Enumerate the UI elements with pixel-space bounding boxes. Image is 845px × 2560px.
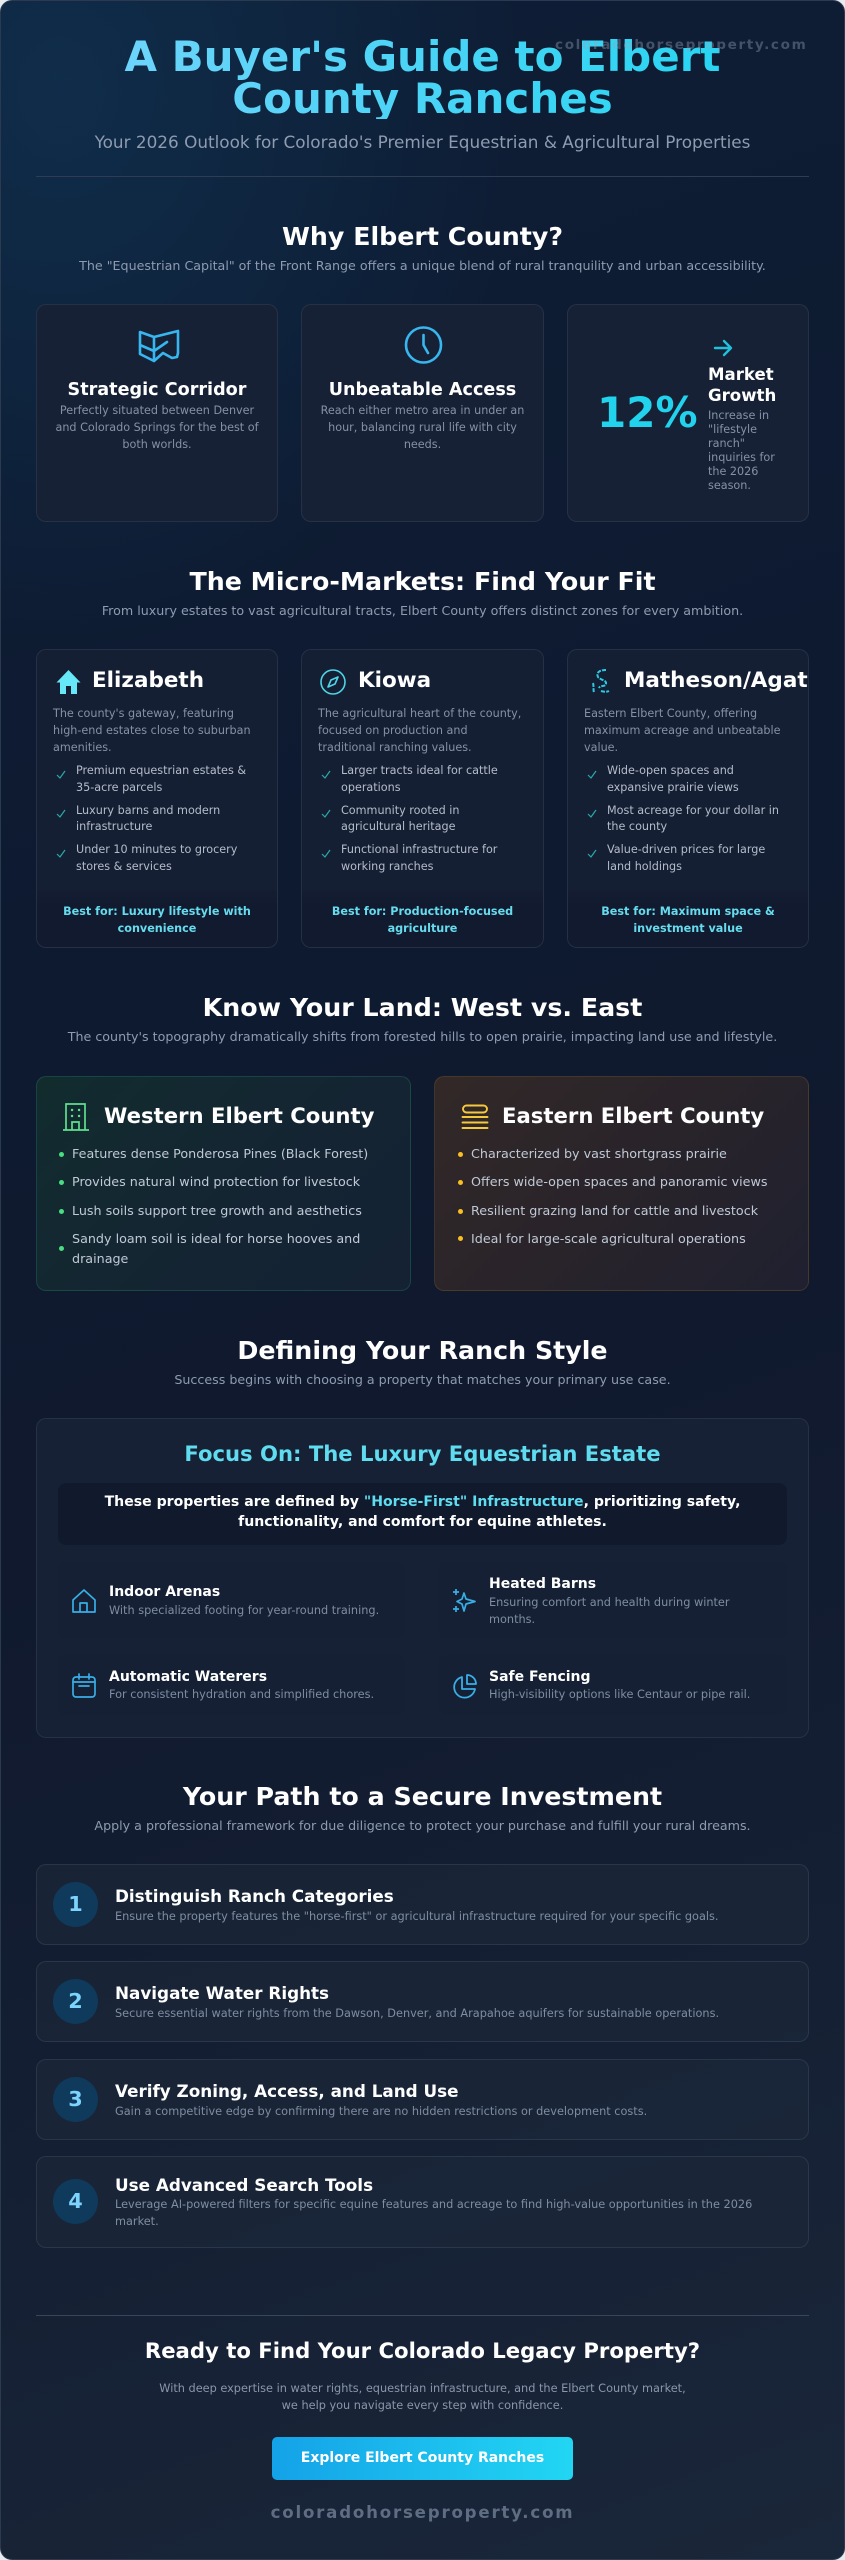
card text: Reach either metro area in under an: [321, 404, 524, 417]
region list: [458, 1146, 768, 1246]
icon: clock: [404, 326, 442, 364]
feature: safe fencing: [439, 1655, 787, 1715]
icon: house: [56, 670, 80, 694]
panel: market growth: [567, 304, 809, 522]
callout: horse-first: [58, 1483, 787, 1545]
checklist: [588, 764, 779, 873]
button: explore: Explore Elbert County Ranches: [301, 2450, 544, 2466]
checklist: [322, 764, 498, 873]
stat: 12 percent: 12%: [597, 388, 698, 437]
feature: indoor arenas: Indoor Arenas: [109, 1584, 220, 1600]
checklist: [56, 764, 246, 873]
feature: heated barns: Ensuring comfort and health during winter: [489, 1596, 730, 1608]
card text: needs.: [404, 438, 441, 451]
region list: drainage: [72, 1251, 128, 1266]
card text: "lifestyle: [708, 423, 757, 436]
checklist: Larger tracts ideal for cattle: [341, 764, 498, 777]
best for: [568, 890, 808, 947]
panel: kiowa: [301, 649, 544, 948]
icon: home: [72, 1589, 96, 1613]
step 1: 1: [68, 1892, 83, 1916]
icon: scale: [592, 669, 610, 693]
panel: matheson/agate: [567, 649, 809, 948]
step 4: 4: [68, 2189, 83, 2213]
text: micro-markets intro: From luxury estates to vast agricultural tracts, Elbert County offers distinct zones for every ambition.: [102, 603, 743, 618]
callout: horse-first: functionality, and comfort for equine athletes.: [238, 1514, 607, 1530]
region list: Features dense Ponderosa Pines (Black Forest): [72, 1146, 368, 1161]
watermark: site name top: coloradohorseproperty.com: [555, 37, 807, 53]
region name: Western Elbert County: [104, 1103, 374, 1128]
feature: indoor arenas: [58, 1562, 405, 1638]
card text: ranch": [708, 437, 745, 450]
feature: heated barns: [439, 1562, 787, 1638]
checklist: working ranches: [341, 860, 433, 873]
checklist: Value-driven prices for large: [607, 843, 765, 856]
best for: convenience: [118, 922, 196, 935]
best for: agriculture: [388, 922, 457, 935]
subtitle: Your 2026 Outlook for Colorado's Premier Equestrian & Agricultural Properties: [95, 132, 750, 152]
checklist: land holdings: [607, 860, 682, 873]
market name: Elizabeth: [92, 668, 204, 693]
step 2: [36, 1961, 809, 2042]
text: investment intro: Apply a professional framework for due diligence to protect your purchase and fulfill your rural dreams.: [94, 1818, 751, 1833]
step 4: Use Advanced Search Tools: [115, 2175, 373, 2195]
card text: Increase in: [708, 409, 769, 422]
checklist: expansive prairie views: [607, 781, 739, 794]
card text: Perfectly situated between Denver: [60, 404, 254, 417]
checklist: agricultural heritage: [341, 820, 456, 833]
step 2: Secure essential water rights from the Dawson, Denver, and Arapahoe aquifers for sustainable operations.: [115, 2007, 719, 2020]
card title: [708, 365, 776, 405]
text: land intro: The county's topography dramatically shifts from forested hills to open prairie, impacting land use and lifestyle.: [68, 1029, 777, 1044]
best for: Best for: Maximum space &: [601, 905, 775, 918]
card text: [708, 409, 775, 492]
region list: Offers wide-open spaces and panoramic views: [471, 1174, 768, 1189]
region list: [59, 1146, 368, 1266]
step 4: [36, 2156, 809, 2248]
text: call to action: [159, 2382, 686, 2412]
text: call to action: we help you navigate every step with confidence.: [282, 2399, 563, 2412]
card text: inquiries for: [708, 451, 775, 464]
icon: building: [63, 1103, 89, 1131]
feature: indoor arenas: With specialized footing for year-round training.: [109, 1604, 379, 1616]
heading: know your land: Know Your Land: West vs. East: [203, 993, 642, 1022]
step 1: Distinguish Ranch Categories: [115, 1886, 394, 1906]
checklist: Luxury barns and modern: [76, 804, 220, 816]
text: why elbert intro: The "Equestrian Capital" of the Front Range offers a unique blend of rural tranquility and urban accessibility.: [79, 258, 766, 273]
text: call to action: With deep expertise in water rights, equestrian infrastructure, and the Elbert County market,: [159, 2382, 686, 2395]
icon: pie chart: [453, 1674, 477, 1698]
market text: [318, 707, 521, 754]
heading: call to action: Ready to Find Your Colorado Legacy Property?: [145, 2338, 700, 2363]
icon: sparkles: [453, 1589, 476, 1612]
region list: Characterized by vast shortgrass prairie: [471, 1146, 727, 1161]
checklist: operations: [341, 781, 401, 794]
card text: and Colorado Springs for the best of: [55, 421, 259, 434]
button: explore: [272, 2437, 573, 2480]
step 4: market.: [115, 2215, 159, 2228]
heading: micro-markets: The Micro-Markets: Find Your Fit: [189, 567, 656, 596]
checklist: the county: [607, 820, 667, 833]
panel: luxury equestrian estate: [36, 1418, 809, 1738]
feature: heated barns: Heated Barns: [489, 1576, 596, 1592]
market text: high-end estates close to suburban: [53, 724, 251, 737]
feature: safe fencing: High-visibility options like Centaur or pipe rail.: [489, 1688, 750, 1701]
title: [100, 36, 745, 119]
feature: automatic waterers: Automatic Waterers: [109, 1669, 267, 1685]
icon: layers: [462, 1104, 488, 1129]
best for: Best for: Production-focused: [332, 905, 513, 918]
heading: secure investment: Your Path to a Secure Investment: [183, 1782, 662, 1811]
feature: automatic waterers: [58, 1655, 405, 1715]
checklist: Community rooted in: [341, 804, 459, 816]
callout: horse-first: These properties are defined by "Horse-First" Infrastructure, prioritizing safety,: [105, 1494, 740, 1510]
footer site name: coloradohorseproperty.com: [271, 2503, 574, 2522]
market text: Eastern Elbert County, offering: [584, 707, 757, 720]
best for: Best for: Luxury lifestyle with: [63, 905, 251, 918]
step 2: 2: [68, 1989, 83, 2013]
checklist: 35-acre parcels: [76, 781, 162, 794]
checklist: Premium equestrian estates &: [76, 764, 246, 777]
card text: [55, 404, 259, 451]
step 3: Gain a competitive edge by confirming there are no hidden restrictions or development costs.: [115, 2105, 647, 2118]
panel heading: Focus On: The Luxury Equestrian Estate: [184, 1441, 661, 1466]
panel: unbeatable access: [301, 304, 544, 522]
icon: arrow: [714, 340, 732, 356]
checklist: Wide-open spaces and: [607, 764, 734, 777]
market text: [53, 707, 251, 754]
title: A Buyer's Guide to Elbert: [124, 32, 721, 81]
region list: Ideal for large-scale agricultural operations: [471, 1231, 746, 1246]
step 2: Navigate Water Rights: [115, 1983, 329, 2003]
card text: season.: [708, 479, 751, 492]
icon: calendar: [72, 1673, 96, 1698]
card text: the 2026: [708, 465, 758, 478]
market name: Kiowa: [358, 668, 431, 693]
heading: defining your ranch style: Defining Your Ranch Style: [237, 1336, 608, 1365]
heading: why elbert county: Why Elbert County?: [282, 222, 563, 251]
checklist: Under 10 minutes to grocery: [76, 843, 237, 856]
market text: value.: [584, 741, 618, 754]
card title: Growth: [708, 386, 776, 405]
feature: safe fencing: Safe Fencing: [489, 1669, 591, 1685]
panel: strategic corridor: [36, 304, 278, 522]
text: ranch style intro: Success begins with choosing a property that matches your primary use case.: [174, 1372, 671, 1387]
region list: Provides natural wind protection for livestock: [72, 1174, 360, 1189]
feature: automatic waterers: For consistent hydration and simplified chores.: [109, 1688, 374, 1701]
checklist: Functional infrastructure for: [341, 843, 497, 856]
step 3: [36, 2059, 809, 2140]
feature: heated barns: months.: [489, 1612, 535, 1626]
panel: western elbert county: [36, 1076, 411, 1291]
icon: compass: [320, 669, 346, 695]
best for: investment value: [633, 922, 743, 935]
step 3: 3: [68, 2087, 83, 2111]
best for: [37, 890, 277, 947]
market text: The agricultural heart of the county,: [318, 707, 521, 720]
region list: Sandy loam soil is ideal for horse hooves and: [72, 1231, 360, 1246]
checklist: stores & services: [76, 860, 172, 873]
icon: map: [138, 330, 180, 362]
market text: focused on production and: [318, 724, 468, 737]
step 1: [36, 1864, 809, 1945]
card text: [321, 404, 524, 451]
panel: eastern elbert county: [434, 1076, 809, 1291]
step 1: Ensure the property features the "horse-first" or agricultural infrastructure required for your specific goals.: [115, 1910, 718, 1923]
region list: Lush soils support tree growth and aesthetics: [72, 1202, 362, 1218]
card title: Market: [708, 365, 774, 384]
checklist: infrastructure: [76, 820, 152, 833]
market text: [584, 707, 781, 754]
card title: Strategic Corridor: [68, 380, 246, 400]
panel: elizabeth: [36, 649, 278, 948]
card title: Unbeatable Access: [329, 380, 516, 400]
card text: both worlds.: [122, 438, 192, 451]
card text: hour, balancing rural life with city: [328, 421, 517, 434]
checklist: Most acreage for your dollar in: [607, 804, 779, 816]
best for: [302, 890, 543, 947]
step 3: Verify Zoning, Access, and Land Use: [115, 2081, 459, 2101]
title: County Ranches: [232, 74, 613, 123]
market text: traditional ranching values.: [318, 741, 472, 754]
market text: maximum acreage and unbeatable: [584, 724, 781, 737]
region name: Eastern Elbert County: [502, 1103, 764, 1128]
market text: The county's gateway, featuring: [53, 707, 234, 720]
market text: amenities.: [53, 741, 112, 754]
step 4: Leverage AI-powered filters for specific equine features and acreage to find high-value opportunities in the 2026: [115, 2198, 752, 2211]
region list: Resilient grazing land for cattle and livestock: [471, 1202, 758, 1218]
